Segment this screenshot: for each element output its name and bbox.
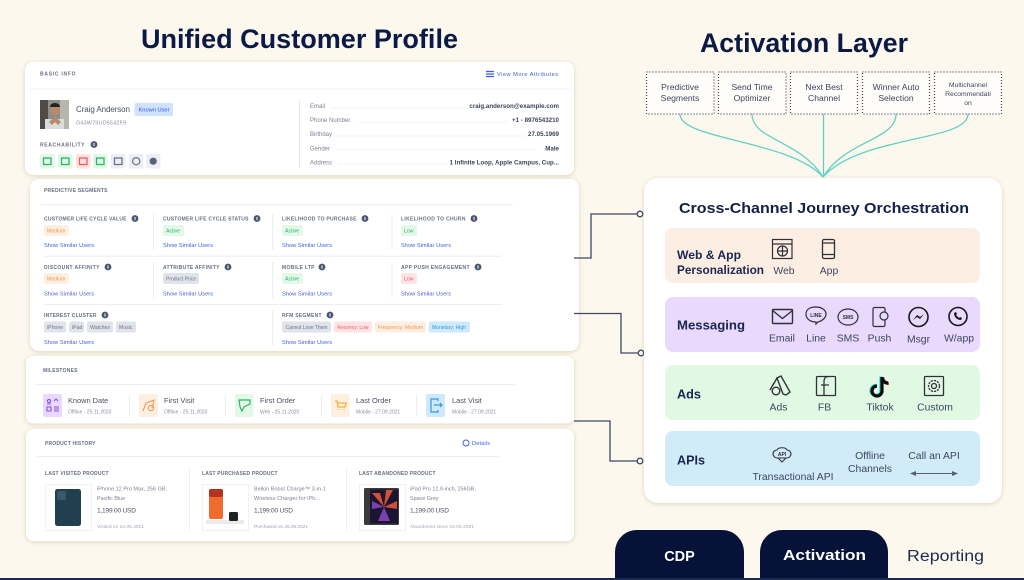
segment: customer life cycle status: CUSTOMER LIFE CYCLE STATUS	[163, 216, 249, 222]
profile photo	[40, 100, 69, 129]
badge: known user	[134, 103, 173, 116]
row: web and app personalization	[665, 228, 980, 283]
box: winner auto selection: Winner Auto	[873, 82, 920, 92]
attribute list: 27.05.1969	[528, 131, 560, 138]
row: ads: Tiktok	[866, 402, 894, 414]
link: view more attributes: View More Attributes	[497, 72, 558, 78]
milestone: known date: Offline - 25.11.2020	[68, 410, 112, 416]
segment: rfm segment	[282, 312, 470, 346]
segment: attribute affinity: Product Price	[166, 276, 196, 282]
row: ads: Ads	[677, 386, 701, 402]
icon: tiktok	[871, 376, 889, 396]
product: last visited: 1,199.00 USD	[97, 508, 136, 514]
row: messaging: Messaging	[677, 318, 745, 332]
product: last visited: iPhone 12 Pro Max, 256 GB,	[97, 486, 168, 492]
user id: G43W79UD6542F9	[76, 120, 126, 126]
segment: likelihood to churn	[401, 215, 477, 249]
milestone: known date	[43, 394, 112, 417]
segment: customer life cycle value	[44, 215, 138, 249]
icon: facebook	[816, 376, 836, 396]
image: iPad	[360, 484, 406, 530]
row: APIs: Transactional API	[752, 472, 834, 483]
attribute list: Email	[310, 104, 325, 110]
product: last purchased: Purchased on 25.05.2021	[254, 524, 308, 530]
product: last visited: Visited on 24.05.2021	[97, 524, 144, 530]
milestone: known date: Known Date	[68, 396, 108, 405]
attribute list: Phone Number	[310, 118, 350, 124]
attribute list: Male	[545, 146, 560, 152]
row: messaging: Msgr	[907, 334, 931, 346]
icon: line	[806, 307, 826, 324]
segment: likelihood to churn: Show Similar Users	[401, 243, 451, 249]
box: send time optimizer: Optimizer	[734, 93, 771, 103]
label: reachability: REACHABILITY	[40, 142, 85, 148]
badge: known user: Known User	[138, 108, 170, 114]
connector: milestones to messaging	[574, 314, 644, 356]
segment: interest cluster: Watches	[90, 325, 110, 331]
attribute list: Gender	[310, 146, 330, 152]
connector: product history to APIs	[574, 421, 643, 464]
product: last abandoned: Space Grey	[410, 496, 439, 502]
product: last purchased	[202, 471, 326, 530]
image: wireless charger	[202, 484, 248, 530]
panel: cross-channel journey orchestration	[644, 178, 1002, 503]
reachability icons	[40, 154, 160, 168]
label: reachability	[40, 141, 97, 148]
icon: API: API	[778, 452, 787, 458]
box: next best channel: Next Best	[805, 82, 843, 92]
icon: web	[772, 240, 792, 258]
box: send time optimizer: Send Time	[731, 82, 773, 92]
product: last purchased: Wireless Charger for iPh...	[254, 496, 320, 502]
tab: Activation: Activation	[783, 548, 866, 564]
connecting curves	[680, 114, 968, 177]
product: last abandoned: LAST ABANDONED PRODUCT	[359, 471, 436, 477]
connector: predictive segments to journey panel	[574, 211, 643, 258]
segment: likelihood to purchase	[282, 215, 368, 249]
label: call an API: Call an API	[908, 451, 960, 462]
milestone: last visit	[426, 394, 496, 417]
icon: line: LINE	[810, 313, 822, 319]
box: multichannel recommendation: Multichannel	[949, 82, 988, 89]
label: offline channels	[848, 451, 892, 475]
icon: messenger	[909, 308, 928, 326]
segment: likelihood to purchase: Show Similar Users	[282, 243, 332, 249]
heading: product history: PRODUCT HISTORY	[45, 441, 96, 447]
segment: discount affinity: Medium	[47, 276, 65, 282]
box: winner auto selection: Selection	[878, 93, 914, 103]
tab: Activation	[760, 530, 888, 578]
image: iPhone	[46, 484, 92, 530]
panel: predictive segments	[30, 179, 579, 351]
heading: predictive segments: PREDICTIVE SEGMENTS	[44, 188, 108, 194]
segment: customer life cycle status: Active	[166, 228, 180, 234]
row: web and app personalization: App	[820, 266, 838, 277]
box: send time optimizer	[718, 72, 786, 114]
attribute list: +1 - 8976543210	[512, 117, 560, 124]
heading: basic info: BASIC INFO	[40, 72, 76, 78]
segment: discount affinity: Show Similar Users	[44, 292, 94, 298]
product: last abandoned: iPad Pro 12.9-inch, 256GB,	[410, 486, 476, 492]
panel: basic info	[25, 62, 574, 175]
heading: milestones: MILESTONES	[43, 368, 78, 374]
tab: Reporting: Reporting	[907, 548, 984, 565]
profile name: Craig Anderson	[76, 105, 130, 114]
icon: sms	[838, 309, 858, 325]
milestone: first visit: Offline - 25.11.2020	[164, 410, 208, 416]
link: details: Details	[472, 441, 490, 447]
label: offline channels: Channels	[848, 464, 892, 475]
attribute list: Address	[310, 160, 332, 166]
milestone: first order	[235, 394, 300, 417]
icon: app	[822, 240, 834, 258]
segment: likelihood to churn: LIKELIHOOD TO CHURN	[401, 216, 466, 222]
segment: attribute affinity: Show Similar Users	[163, 292, 213, 298]
row: messaging: Line	[806, 334, 826, 344]
product: last visited: Pacific Blue	[97, 496, 125, 502]
product: last purchased: 1,199.00 USD	[254, 508, 293, 514]
icon: API	[773, 448, 791, 462]
segment: interest cluster: INTEREST CLUSTER	[44, 313, 97, 319]
segment: rfm segment: Cannot Lose Them	[286, 325, 328, 331]
attribute list: craig.anderson@example.com	[469, 103, 559, 110]
segment: discount affinity	[44, 264, 111, 298]
segment: interest cluster: iPad	[72, 325, 82, 331]
link: details	[463, 440, 490, 447]
row: web and app personalization: Web	[773, 266, 795, 277]
segment: discount affinity: DISCOUNT AFFINITY	[44, 265, 100, 271]
segment: customer life cycle value: CUSTOMER LIFE CYCLE VALUE	[44, 216, 127, 222]
panel: product history	[26, 429, 574, 541]
segment: customer life cycle status: Show Similar Users	[163, 243, 213, 249]
icon: whatsapp	[949, 308, 967, 326]
milestone: last visit: Mobile - 27.09.2021	[452, 410, 496, 416]
label: offline channels: Offline	[855, 451, 885, 462]
box: predictive segments: Predictive	[661, 82, 699, 92]
segment: interest cluster	[44, 312, 136, 346]
title: Unified Customer Profile: Unified Customer Profile	[141, 24, 458, 54]
segment: interest cluster: Show Similar Users	[44, 340, 94, 346]
box: predictive segments: Segments	[661, 93, 699, 103]
product: last purchased: Belkin Boost Charge™ 3-in-1	[254, 486, 326, 492]
milestone: first order: Web - 25.11.2020	[260, 410, 300, 416]
segment: app push engagement	[401, 264, 481, 298]
segment: app push engagement: APP PUSH ENGAGEMENT	[401, 265, 470, 271]
segment: rfm segment: Monetary: High	[432, 325, 466, 331]
segment: interest cluster: iPhone	[47, 325, 63, 331]
product: last visited: LAST VISITED PRODUCT	[45, 471, 109, 477]
tab bar	[0, 530, 1024, 580]
box: multichannel recommendation: Recommendati	[945, 91, 991, 98]
icon: email	[772, 310, 792, 324]
attribute list: 1 Infinite Loop, Apple Campus, Cup...	[450, 160, 559, 166]
product: last abandoned: Abandoned since 24.05.2021	[410, 524, 474, 530]
segment: mobile ltp: Active	[285, 276, 299, 282]
row: APIs: APIs	[677, 452, 705, 468]
icon: custom	[924, 376, 944, 396]
segment: mobile ltp: Show Similar Users	[282, 292, 332, 298]
milestone: first visit	[139, 394, 208, 417]
activation boxes	[646, 72, 1002, 114]
box: next best channel	[790, 72, 858, 114]
segment: interest cluster: Music	[119, 325, 133, 331]
product: last abandoned: 1,199.00 USD	[410, 508, 449, 514]
segment: rfm segment: Show Similar Users	[282, 340, 332, 346]
segment: rfm segment: RFM SEGMENT	[282, 313, 322, 319]
row: messaging: Push	[868, 334, 892, 344]
box: predictive segments	[646, 72, 714, 114]
row: ads: FB	[818, 402, 831, 414]
segment: attribute affinity: ATTRIBUTE AFFINITY	[163, 265, 220, 271]
segment: mobile ltp: MOBILE LTP	[282, 265, 315, 271]
segment: rfm segment: Frequency: Medium	[378, 325, 423, 331]
panel: milestones	[26, 356, 574, 424]
row: messaging: SMS	[837, 334, 859, 344]
segment: attribute affinity	[163, 264, 231, 298]
milestone: first order: First Order	[260, 396, 296, 405]
icon: sms: SMS	[843, 315, 854, 321]
box: winner auto selection	[862, 72, 930, 114]
segment: app push engagement: Show Similar Users	[401, 292, 451, 298]
row: messaging: W/app	[944, 334, 974, 344]
icon: google ads	[770, 376, 790, 395]
segment: likelihood to purchase: LIKELIHOOD TO PURCHASE	[282, 216, 357, 222]
heading: orchestration: Cross-Channel Journey Orchestration	[679, 200, 969, 217]
milestone: last order: Mobile - 27.09.2021	[356, 410, 400, 416]
segment: customer life cycle status	[163, 215, 260, 249]
box: multichannel recommendation: on	[964, 100, 972, 107]
milestone: last visit: Last Visit	[452, 396, 482, 405]
row: messaging	[665, 297, 980, 352]
segment: mobile ltp	[282, 264, 332, 298]
milestone: first visit: First Visit	[164, 396, 194, 405]
attribute list: Birthday	[310, 132, 332, 138]
row: web and app personalization: Personalization	[677, 263, 764, 277]
row: ads	[665, 365, 980, 420]
attribute list	[310, 103, 560, 166]
product: last visited	[45, 471, 168, 530]
row: ads: Ads	[770, 402, 787, 414]
title: Activation Layer: Activation Layer	[700, 28, 908, 58]
row: messaging: Email	[769, 334, 795, 344]
icon: push	[873, 308, 888, 326]
segment: customer life cycle value: Medium	[47, 228, 65, 234]
row: ads: Custom	[917, 402, 953, 414]
box: next best channel: Channel	[808, 93, 840, 103]
segment: likelihood to purchase: Active	[285, 228, 299, 234]
product: last purchased: LAST PURCHASED PRODUCT	[202, 471, 278, 477]
segment: app push engagement: Low	[404, 276, 414, 282]
segment: likelihood to churn: Low	[404, 228, 414, 234]
row: web and app personalization: Web & App	[677, 248, 741, 262]
milestone: last order: Last Order	[356, 396, 391, 405]
milestone: last order	[331, 394, 400, 417]
tab: CDP	[615, 530, 744, 578]
segment: rfm segment: Recency: Low	[338, 325, 369, 331]
segment: customer life cycle value: Show Similar Users	[44, 243, 94, 249]
tab: CDP: CDP	[664, 549, 695, 565]
row: APIs	[665, 431, 980, 486]
product: last abandoned	[359, 471, 476, 530]
arrow: two-way	[910, 471, 958, 476]
box: multichannel recommendation	[934, 72, 1002, 114]
